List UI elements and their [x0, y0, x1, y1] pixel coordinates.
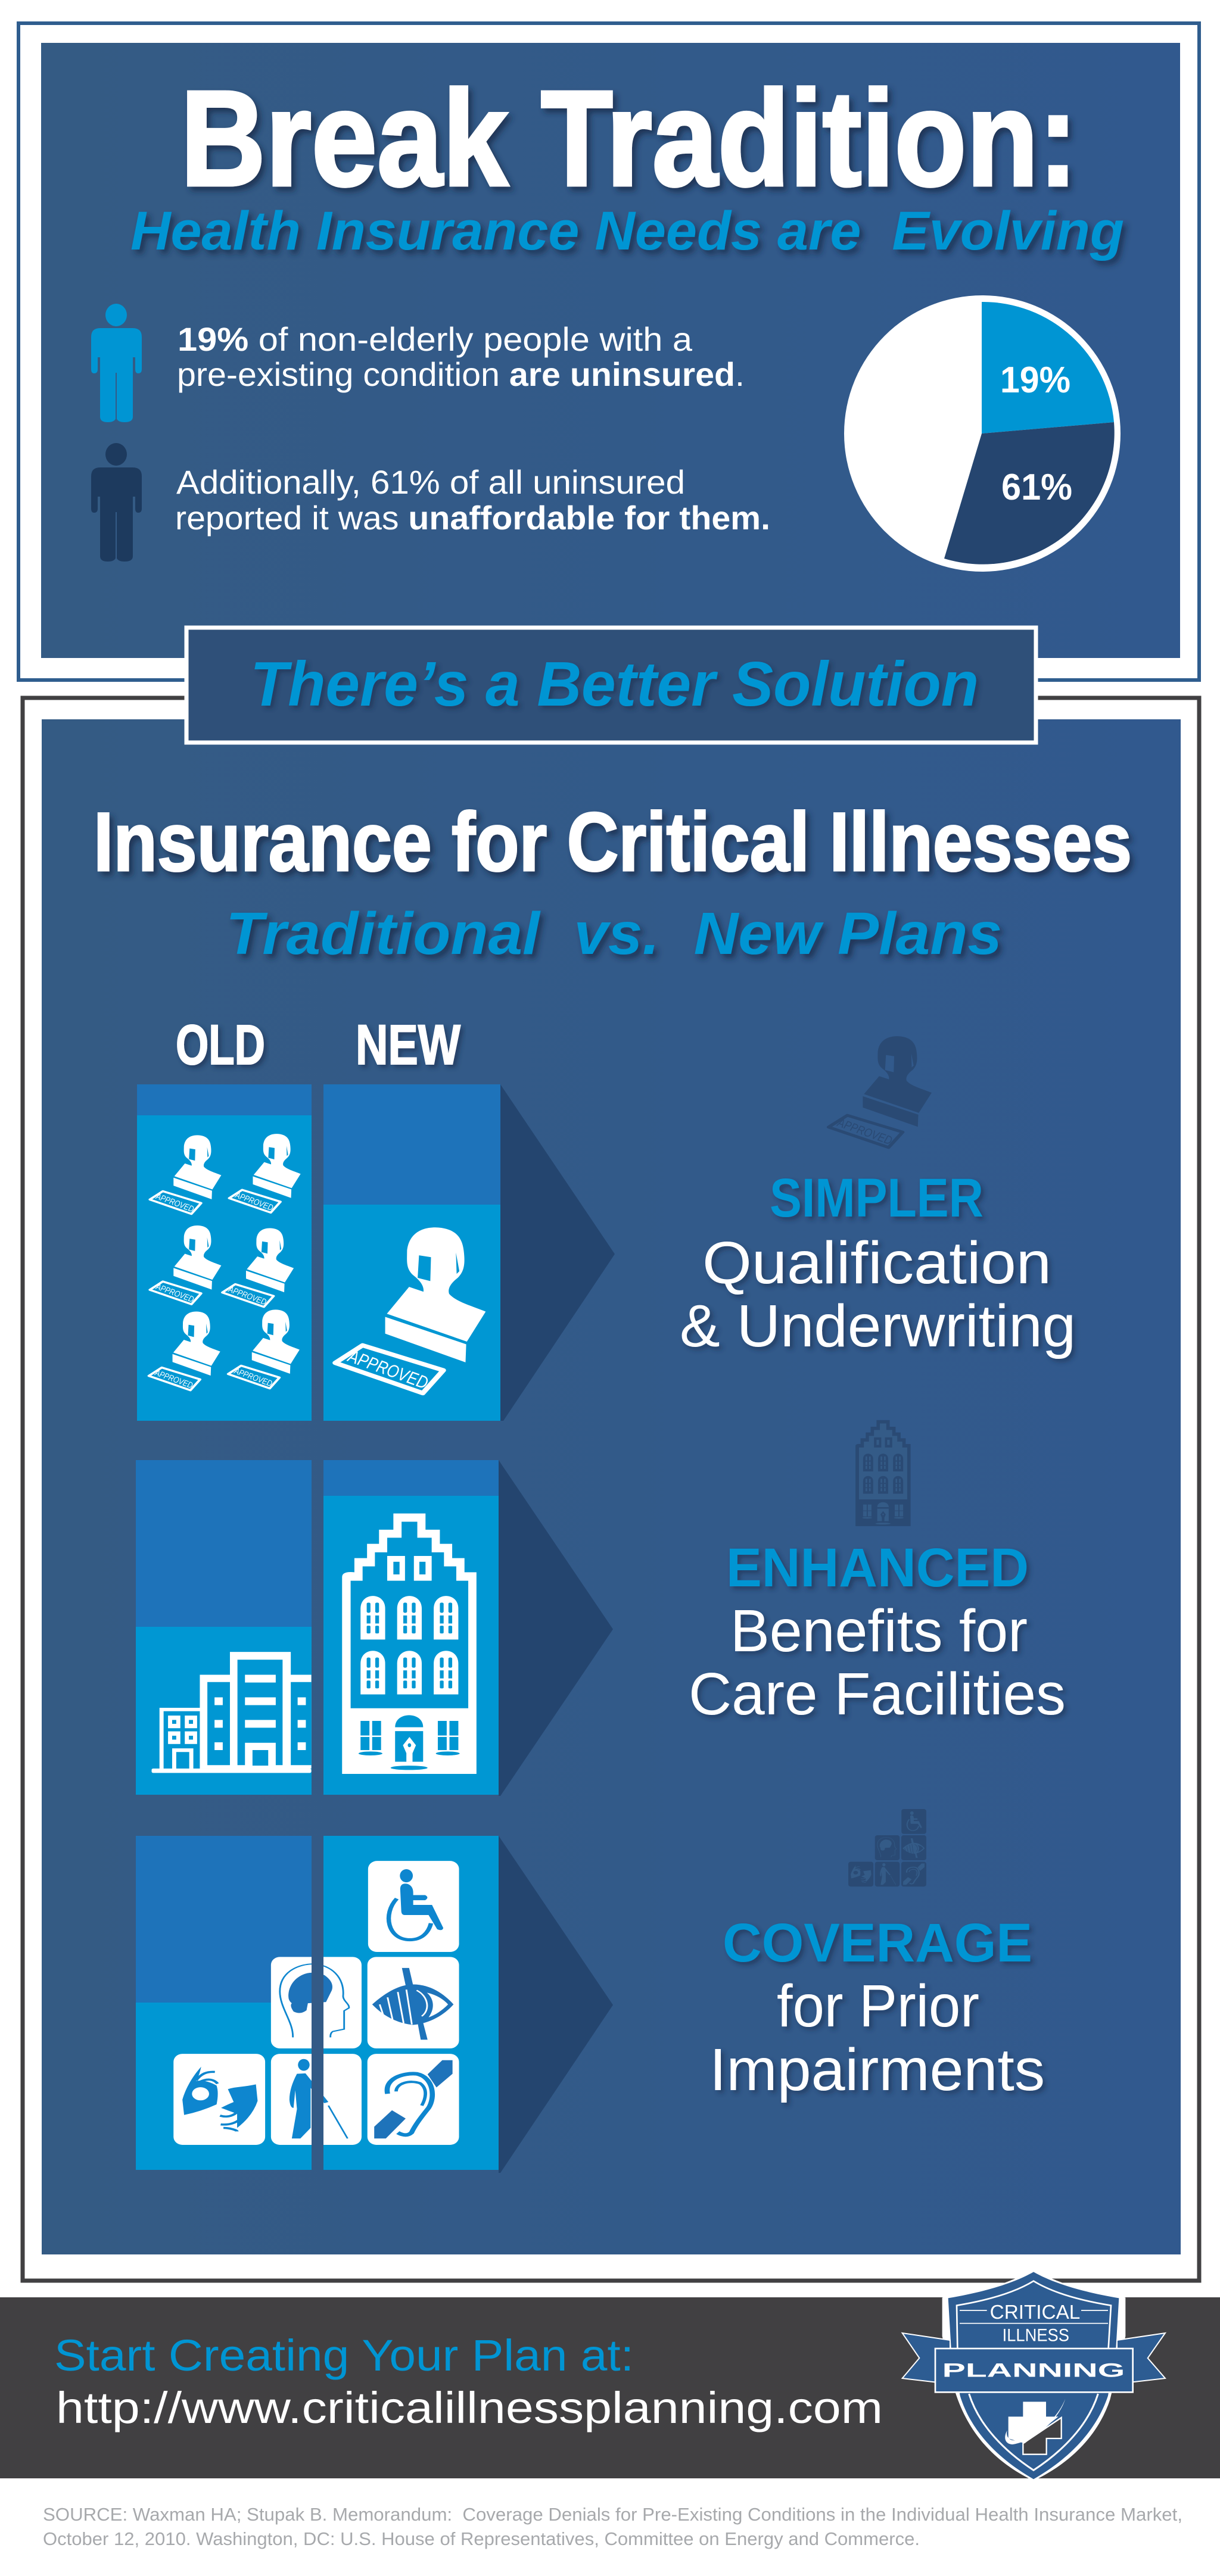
subtitle: Health Insurance Needs are Evolving [130, 201, 1124, 261]
text block: enhanced [689, 1538, 1066, 1727]
bar: new qualification [323, 1084, 500, 1421]
column label: old: OLD [176, 1013, 265, 1077]
text block: 19 percent statistic: 19% of non-elderly people with a [178, 320, 693, 358]
text block: 19 percent statistic [177, 320, 745, 393]
text block: 61 percent statistic: Additionally, 61% of all uninsured [176, 463, 685, 501]
text block: 19 percent statistic: pre-existing condition are uninsured. [177, 355, 745, 393]
call to action [54, 2331, 883, 2432]
text block: enhanced: ENHANCED [726, 1538, 1029, 1598]
logo: critical illness planning shield: ILLNESS [1003, 2326, 1069, 2346]
icons: six small approved stamps: APPROVED [154, 1192, 195, 1214]
logo: critical illness planning shield: PLANNING [942, 2360, 1125, 2381]
arrow: row 2 [499, 1460, 613, 1796]
icon: faint building [855, 1420, 911, 1526]
icon: large approved stamp: APPROVED [345, 1346, 431, 1393]
icon: stepped gable care home [342, 1514, 477, 1774]
column gap [312, 1836, 323, 2170]
text block: enhanced: Care Facilities [689, 1661, 1066, 1727]
icon: blue person [91, 304, 142, 422]
source citation: SOURCE: Waxman HA; Stupak B. Memorandum: Coverage Denials for Pre-Existing Conditions in the Individual Health Insurance Market, [43, 2504, 1182, 2525]
panel: footer bar [0, 2297, 1220, 2478]
source citation [43, 2504, 1182, 2549]
bar: old coverage [136, 1836, 312, 2170]
logo: critical illness planning shield: CRITICAL [990, 2301, 1080, 2324]
row 1: qualification bars [137, 1084, 615, 1421]
title: Break Tradition: [180, 63, 1078, 214]
icons: six small approved stamps: APPROVED [234, 1190, 275, 1213]
source citation: October 12, 2010. Washington, DC: U.S. House of Representatives, Committee on Energy and Commerce. [43, 2528, 920, 2549]
text block: simpler: Qualification [702, 1230, 1051, 1296]
row 3: prior impairments bars [136, 1836, 613, 2173]
icon: faint stamp: APPROVED [835, 1116, 894, 1147]
logo: critical illness planning shield [902, 2268, 1165, 2481]
text block: 61 percent statistic: reported it was unaffordable for them. [175, 499, 770, 537]
text block: simpler [680, 1168, 1076, 1359]
icons: six small approved stamps: APPROVED [154, 1282, 195, 1305]
icons: six small approved stamps: APPROVED [232, 1366, 273, 1389]
text block: 61 percent statistic [175, 463, 770, 537]
row 2: care facilities bars [136, 1460, 613, 1796]
pie chart: 19% [1000, 360, 1070, 401]
bar: new coverage [323, 1836, 499, 2170]
icons: six small approved stamps [149, 1134, 301, 1390]
icon: faint stamp [829, 1036, 932, 1147]
column label: new: NEW [356, 1013, 460, 1077]
icons: six impairment tiles [173, 1861, 459, 2145]
text block: coverage: COVERAGE [723, 1913, 1032, 1973]
text block: coverage: for Prior [777, 1973, 979, 2039]
arrow: row 3 [499, 1836, 613, 2173]
text block: coverage: Impairments [709, 2037, 1045, 2103]
call to action: http://www.criticalillnessplanning.com [56, 2383, 883, 2432]
pie chart [844, 295, 1121, 572]
call to action: Start Creating Your Plan at: [54, 2331, 634, 2380]
icon: modern care buildings [152, 1652, 312, 1773]
text block: simpler: & Underwriting [680, 1293, 1076, 1359]
subheading: traditional vs new plans: Traditional vs. New Plans [226, 900, 1002, 967]
text block: coverage [709, 1913, 1045, 2103]
banner: better solution [186, 628, 1036, 743]
arrow: row 1 [500, 1084, 615, 1421]
pie chart: 61% [1001, 467, 1072, 508]
text block: simpler: SIMPLER [770, 1168, 984, 1228]
icon: faint impairment tiles [848, 1809, 926, 1886]
bar: old care facilities [136, 1460, 312, 1795]
icon: large approved stamp [335, 1227, 485, 1393]
text block: enhanced: Benefits for [730, 1598, 1028, 1664]
icon: dark person [91, 443, 142, 562]
bar: new care facilities [323, 1460, 499, 1795]
panel: top section frame [18, 23, 1199, 680]
banner: better solution: There’s a Better Solution [250, 649, 979, 719]
icons: six small approved stamps: APPROVED [226, 1284, 267, 1307]
icons: six small approved stamps: APPROVED [153, 1368, 194, 1390]
panel: lower section frame [23, 698, 1199, 2281]
bar: old qualification [137, 1084, 312, 1421]
